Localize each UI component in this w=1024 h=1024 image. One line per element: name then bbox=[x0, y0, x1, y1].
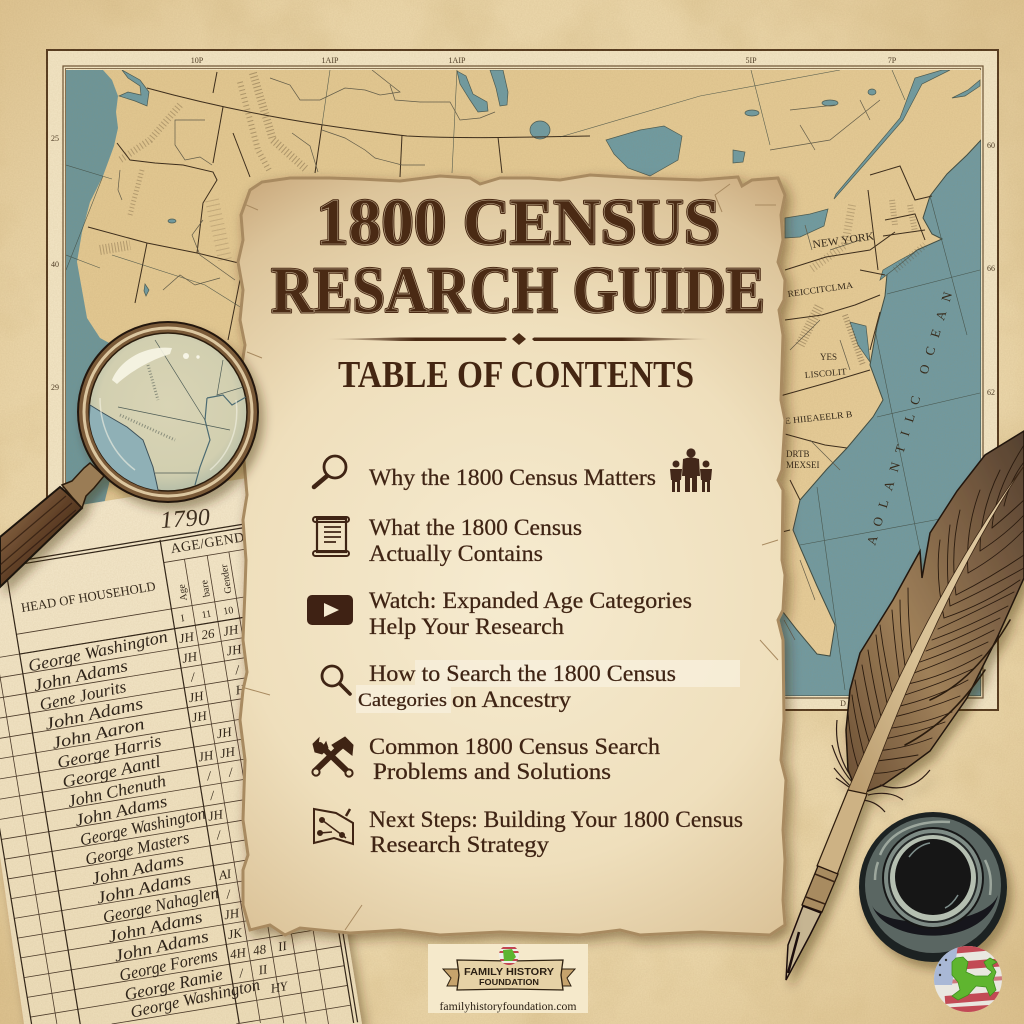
table headers: Gender bbox=[219, 563, 235, 594]
map axis labels: 1AIP bbox=[449, 56, 466, 65]
map place labels: LISCOLIT bbox=[804, 366, 848, 380]
logo: Family History Foundation bbox=[428, 944, 588, 1013]
household names: George Washington bbox=[26, 627, 169, 676]
quill barrel bbox=[817, 790, 867, 875]
tally marks: JH bbox=[181, 648, 199, 666]
household names: George Washington bbox=[129, 975, 262, 1022]
logo text: familyhistoryfoundation.com bbox=[440, 999, 577, 1013]
table headers: 11 bbox=[201, 609, 212, 621]
title: RESARCH GUIDE bbox=[271, 254, 765, 327]
tally marks: / bbox=[224, 886, 233, 902]
tally marks: JH bbox=[190, 708, 208, 725]
tally marks: II bbox=[256, 961, 269, 978]
household names: George Harris bbox=[55, 731, 163, 772]
sheet year: 1790 bbox=[160, 505, 211, 534]
item text: What the 1800 Census bbox=[369, 515, 582, 540]
item 2 bbox=[313, 515, 582, 566]
item 1 bbox=[314, 448, 712, 492]
feather wisps bbox=[832, 720, 930, 812]
parchment cracks bbox=[244, 184, 778, 930]
tally marks: JH bbox=[197, 747, 215, 764]
latitude and longitude lines bbox=[66, 70, 980, 690]
map axis labels: 62 bbox=[987, 388, 995, 397]
magnifier handle bbox=[0, 463, 104, 587]
item text bbox=[369, 588, 692, 639]
mountain ranges bbox=[100, 73, 925, 365]
item text: Problems and Solutions bbox=[373, 759, 611, 784]
census ledger bbox=[0, 519, 359, 1024]
map axis labels: 60 bbox=[987, 141, 995, 150]
item text: Why the 1800 Census Matters bbox=[369, 465, 656, 490]
household names: John Adams bbox=[106, 907, 204, 946]
tally marks: / bbox=[226, 764, 235, 780]
tally marks: / bbox=[208, 787, 216, 803]
logo banner bbox=[443, 960, 575, 990]
item 6 bbox=[314, 807, 743, 857]
household names: John Adams bbox=[43, 694, 145, 734]
household names: John Adams bbox=[32, 656, 130, 695]
item text: How to Search the 1800 Census bbox=[369, 661, 676, 686]
magnifier lens bbox=[78, 322, 258, 502]
household names: Gene Jourits bbox=[38, 677, 128, 714]
map axis labels: 25 bbox=[51, 134, 59, 143]
title: 1800 CENSUS bbox=[316, 186, 720, 259]
map place labels bbox=[784, 230, 955, 547]
tally marks: II bbox=[276, 938, 288, 954]
logo text bbox=[440, 966, 577, 1013]
west ocean bbox=[66, 70, 118, 504]
map axis labels: 40 bbox=[51, 260, 59, 269]
map place labels: E HIIEAEELR B bbox=[784, 409, 853, 426]
title bbox=[271, 186, 765, 327]
medal: flag and lion bbox=[934, 946, 1002, 1012]
map place labels: REICCITCLMA bbox=[787, 280, 854, 299]
logo backing bbox=[428, 944, 588, 1013]
household names: John Adams bbox=[90, 849, 186, 888]
subtitle: TABLE OF CONTENTS bbox=[338, 354, 694, 396]
tally marks: JH bbox=[187, 688, 205, 705]
tally marks bbox=[177, 621, 298, 1001]
tally marks: H bbox=[233, 681, 247, 698]
map axis labels: 5IP bbox=[745, 56, 757, 65]
icon: wrench and hammer bbox=[312, 737, 353, 777]
household names bbox=[25, 621, 263, 1024]
household names: John Adams bbox=[95, 868, 193, 908]
atlantic ocean bbox=[770, 140, 981, 696]
map place labels: NEW YORK bbox=[812, 230, 875, 251]
item text bbox=[369, 734, 661, 784]
map frame bbox=[47, 50, 998, 710]
household names: John Adams bbox=[112, 926, 211, 965]
tally marks: 48 bbox=[252, 941, 268, 958]
map place labels: MEXSEI bbox=[786, 460, 820, 470]
household names: George Nahaglen bbox=[101, 883, 220, 927]
title divider bbox=[324, 333, 712, 345]
map axis labels: 1AIP bbox=[322, 56, 339, 65]
icon: magnifier bbox=[314, 456, 346, 487]
census sheet paper bbox=[0, 474, 362, 1024]
table headers: Age bbox=[176, 583, 190, 602]
item 4 bbox=[322, 660, 740, 713]
icon: route map bbox=[314, 809, 353, 844]
pen nib bbox=[786, 906, 821, 980]
tally marks: / bbox=[205, 768, 213, 783]
puget sound bbox=[119, 70, 149, 106]
green lion bbox=[952, 957, 997, 1000]
item 5 bbox=[312, 734, 661, 784]
household names: George Masters bbox=[83, 828, 191, 869]
table headers: I bbox=[180, 613, 185, 624]
item 3 bbox=[307, 588, 692, 639]
map axis labels: D bbox=[840, 699, 846, 708]
pen ferrule bbox=[802, 866, 838, 912]
state boundaries bbox=[88, 72, 932, 532]
tally marks: / bbox=[214, 827, 223, 843]
household names: George Forems bbox=[118, 945, 220, 985]
icon: video play bbox=[307, 595, 353, 625]
household names: John Aaron bbox=[50, 714, 146, 753]
flag medal disc bbox=[934, 946, 1002, 1012]
ledger grid bbox=[0, 544, 353, 1024]
tally marks: / bbox=[237, 965, 245, 981]
item text: Common 1800 Census Search bbox=[369, 734, 661, 759]
table headers: 10 bbox=[223, 605, 234, 617]
icon: quill feather bbox=[786, 431, 1024, 980]
item text: Watch: Expanded Age Categories bbox=[369, 588, 692, 613]
icon: scroll bbox=[313, 517, 349, 556]
tally marks: JH bbox=[222, 621, 240, 639]
table headers: bare bbox=[199, 579, 213, 598]
item text bbox=[369, 515, 582, 566]
item text: Help Your Research bbox=[369, 614, 565, 639]
logo text: FOUNDATION bbox=[479, 977, 539, 987]
rivers bbox=[118, 70, 880, 640]
household names: George Ramie bbox=[123, 964, 225, 1004]
tally marks: 4H bbox=[229, 944, 248, 962]
map axis labels: 29 bbox=[51, 383, 59, 392]
tally marks: JH bbox=[219, 744, 237, 761]
map axis labels bbox=[51, 56, 995, 708]
parchment sheet bbox=[238, 175, 786, 935]
item text: Research Strategy bbox=[370, 832, 550, 857]
panel: background map bbox=[47, 50, 998, 710]
item text: on Ancestry bbox=[452, 687, 572, 712]
quill shaft bbox=[848, 466, 1024, 794]
logo text: FAMILY HISTORY bbox=[464, 966, 554, 978]
icon: inkwell bbox=[859, 812, 1007, 962]
tally marks: 26 bbox=[200, 625, 216, 642]
map axis labels: 7P bbox=[888, 56, 897, 65]
logo medal bbox=[498, 945, 520, 965]
panel: parchment table of contents bbox=[238, 175, 786, 935]
item text bbox=[369, 807, 743, 857]
feather barbs bbox=[848, 445, 1024, 773]
tally marks: JH bbox=[225, 641, 243, 659]
tally marks: JH bbox=[223, 905, 241, 922]
map axis labels: 66 bbox=[987, 264, 995, 273]
map land and seas bbox=[66, 70, 981, 696]
icon: search bbox=[322, 666, 350, 694]
table headers bbox=[15, 527, 275, 650]
item text: Categories bbox=[358, 690, 447, 711]
icon: family bbox=[670, 448, 712, 492]
item text: Next Steps: Building Your 1800 Census bbox=[369, 807, 743, 832]
item text bbox=[358, 661, 676, 712]
table headers: HEAD OF HOUSEHOLD bbox=[20, 578, 157, 615]
tally marks: JH bbox=[215, 724, 233, 741]
feather vane bbox=[846, 431, 1024, 795]
item text: Actually Contains bbox=[369, 541, 543, 566]
household names: George Washington bbox=[78, 804, 207, 849]
tally marks: HY bbox=[268, 978, 290, 996]
inland lakes and rivers bbox=[144, 70, 980, 362]
household names: John Adams bbox=[73, 791, 169, 830]
tally marks: / bbox=[189, 669, 197, 685]
household names: John Chenuth bbox=[66, 771, 168, 811]
household names: George Aantl bbox=[61, 752, 163, 792]
map place labels: YES bbox=[820, 352, 837, 362]
ledger heavy rules bbox=[0, 519, 359, 1024]
icon: magnifying glass bbox=[0, 322, 258, 587]
tally marks: / bbox=[233, 662, 241, 677]
map place labels: AOLANTILC OCEAN bbox=[864, 289, 955, 547]
title: RESARCH GUIDE bbox=[271, 254, 765, 327]
map axis labels: 10P bbox=[191, 56, 204, 65]
text highlights bbox=[356, 660, 740, 713]
tally marks: JH bbox=[207, 806, 225, 824]
tally marks: JK bbox=[226, 925, 244, 942]
title: 1800 CENSUS bbox=[316, 186, 720, 259]
table headers: AGE/GENDER bbox=[170, 527, 264, 557]
tally marks: JH bbox=[177, 629, 195, 646]
tally marks: AI bbox=[217, 866, 233, 883]
map place labels: DRTB bbox=[786, 449, 809, 459]
